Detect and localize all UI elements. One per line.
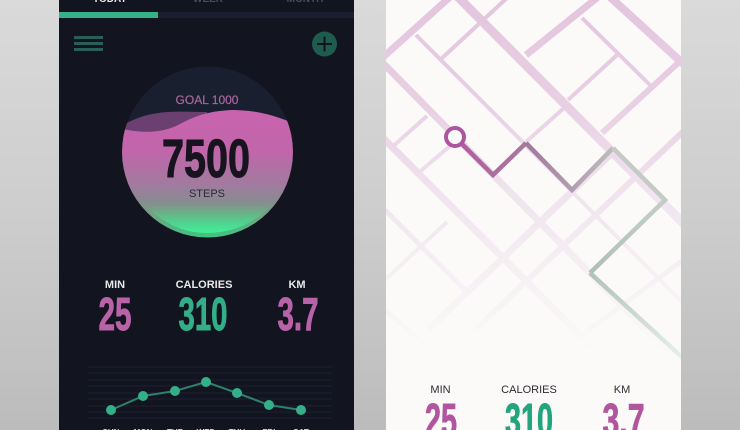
steps label: STEPS bbox=[189, 188, 225, 200]
stat: calories: CALORIES bbox=[501, 384, 557, 396]
back wave bbox=[122, 112, 207, 140]
icon: add button bbox=[312, 32, 337, 56]
tabs bbox=[93, 0, 323, 5]
green glow bbox=[149, 208, 268, 233]
front wave and liquid bbox=[118, 110, 295, 240]
stats: light bbox=[425, 384, 644, 430]
stat: km: KM bbox=[288, 279, 306, 291]
stat: calories bbox=[501, 384, 557, 430]
stat: km: 3.7 bbox=[278, 288, 318, 340]
panel: dark activity screen bbox=[59, 0, 354, 430]
panel: light map screen bbox=[380, 0, 700, 430]
steps value: 7500 bbox=[162, 129, 250, 189]
stat: calories: CALORIES bbox=[176, 279, 232, 291]
icon: menu bbox=[74, 36, 103, 51]
stat: calories bbox=[176, 279, 232, 340]
map roads bbox=[386, 0, 681, 288]
route path bbox=[461, 143, 683, 358]
stats: dark bbox=[98, 279, 318, 340]
stat: min: MIN bbox=[430, 384, 451, 396]
stat: min: 25 bbox=[98, 288, 132, 340]
stat: km bbox=[278, 279, 318, 340]
stat: km: KM bbox=[614, 384, 630, 396]
line chart bbox=[88, 367, 332, 430]
stat: calories: 310 bbox=[178, 288, 228, 340]
route start marker bbox=[446, 128, 464, 146]
goal label: GOAL 1000 bbox=[176, 93, 239, 107]
step gauge bbox=[118, 66, 295, 240]
stat: km bbox=[602, 384, 644, 430]
stat: min: MIN bbox=[105, 279, 125, 291]
tab progress bar bbox=[59, 12, 354, 18]
stat: min bbox=[425, 384, 457, 430]
stat: min bbox=[98, 279, 132, 340]
